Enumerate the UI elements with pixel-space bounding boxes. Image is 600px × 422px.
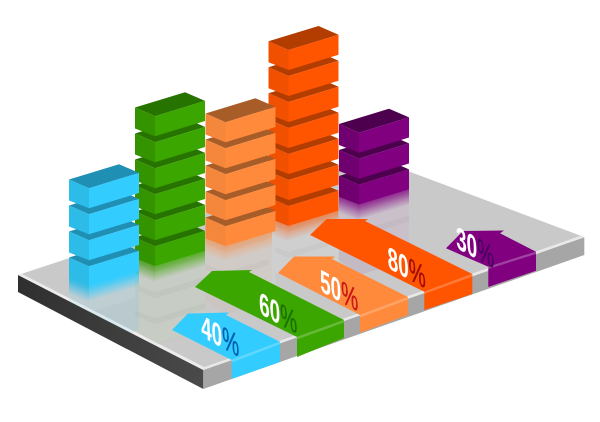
- column: purple 30%: [339, 109, 409, 205]
- arrow: orange 50%: [278, 256, 408, 333]
- label: 80%: 80%: [387, 239, 426, 296]
- label: 50%: 50%: [319, 262, 359, 319]
- arrow: purple 30%: [446, 219, 536, 287]
- platform base: [18, 158, 584, 389]
- column reflections on platform: [69, 188, 409, 345]
- label: 60%: 60%: [258, 284, 298, 341]
- column: orange 50%: [206, 98, 276, 246]
- column: blue 40%: [69, 164, 139, 286]
- arrow: green 60%: [195, 270, 344, 357]
- column: green 60%: [135, 92, 205, 266]
- arrow: red-orange 80%: [310, 219, 472, 310]
- label: 30%: 30%: [455, 219, 495, 276]
- column: red-orange 80%: [268, 26, 338, 226]
- label: 40%: 40%: [200, 307, 240, 364]
- arrow: blue 40%: [172, 307, 280, 379]
